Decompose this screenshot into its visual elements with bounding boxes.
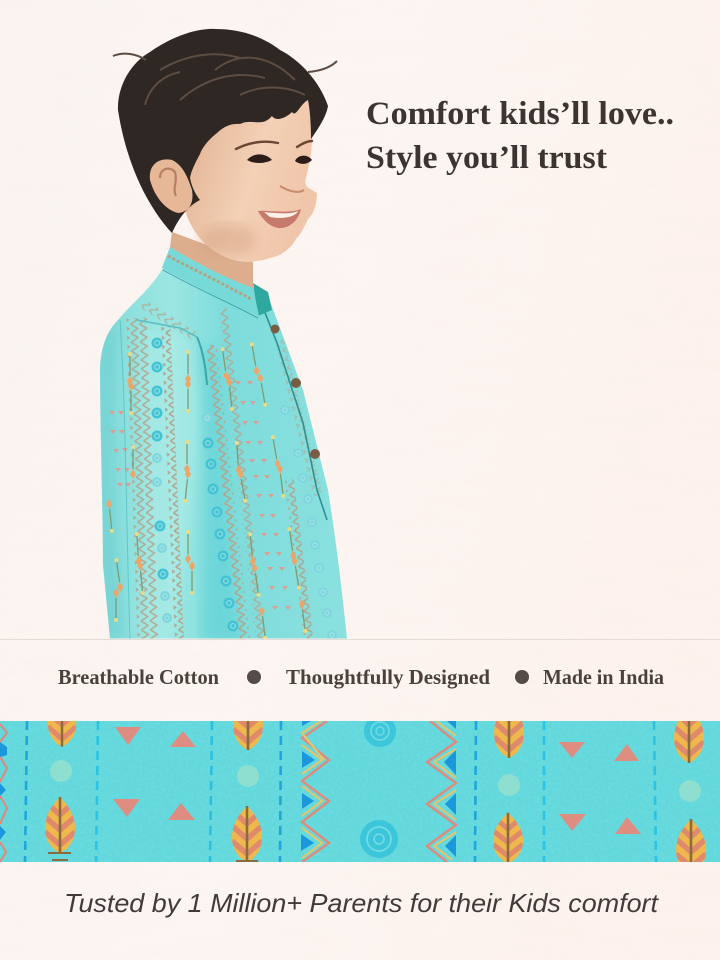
heading: Style you’ll trust xyxy=(366,140,607,176)
hair xyxy=(113,29,337,233)
feature: thoughtfully designed: Thoughtfully Designed xyxy=(286,665,490,689)
feature: made in india: Made in India xyxy=(543,665,664,689)
separator dot 2 xyxy=(515,670,529,684)
collar xyxy=(162,247,272,318)
dashed stitch lines xyxy=(25,721,656,862)
trust tagline: Tusted by 1 Million+ Parents for their Kids comfort xyxy=(64,888,660,918)
feature: breathable cotton: Breathable Cotton xyxy=(58,665,219,689)
features strip xyxy=(0,639,720,689)
shirt print: small triangles xyxy=(109,381,291,610)
face xyxy=(170,95,317,288)
heading: Comfort kids’ll love.. xyxy=(366,96,674,132)
buttons xyxy=(270,324,320,459)
left zigzag xyxy=(301,721,329,862)
left edge zigzag xyxy=(0,724,7,862)
ear xyxy=(150,159,192,213)
fabric pattern band xyxy=(0,721,720,862)
boy photo xyxy=(95,29,355,649)
heading xyxy=(366,96,674,176)
triangles xyxy=(113,727,641,834)
head xyxy=(113,29,337,288)
kurta shirt xyxy=(95,240,355,649)
shirt print: sleeve and body circles xyxy=(152,338,337,640)
shirt print: arrows xyxy=(106,342,308,640)
separator dot 1 xyxy=(247,670,261,684)
concentric circle motifs xyxy=(360,715,398,858)
pale dots xyxy=(50,760,701,802)
right zigzag xyxy=(427,721,456,862)
leaves xyxy=(4,721,706,862)
